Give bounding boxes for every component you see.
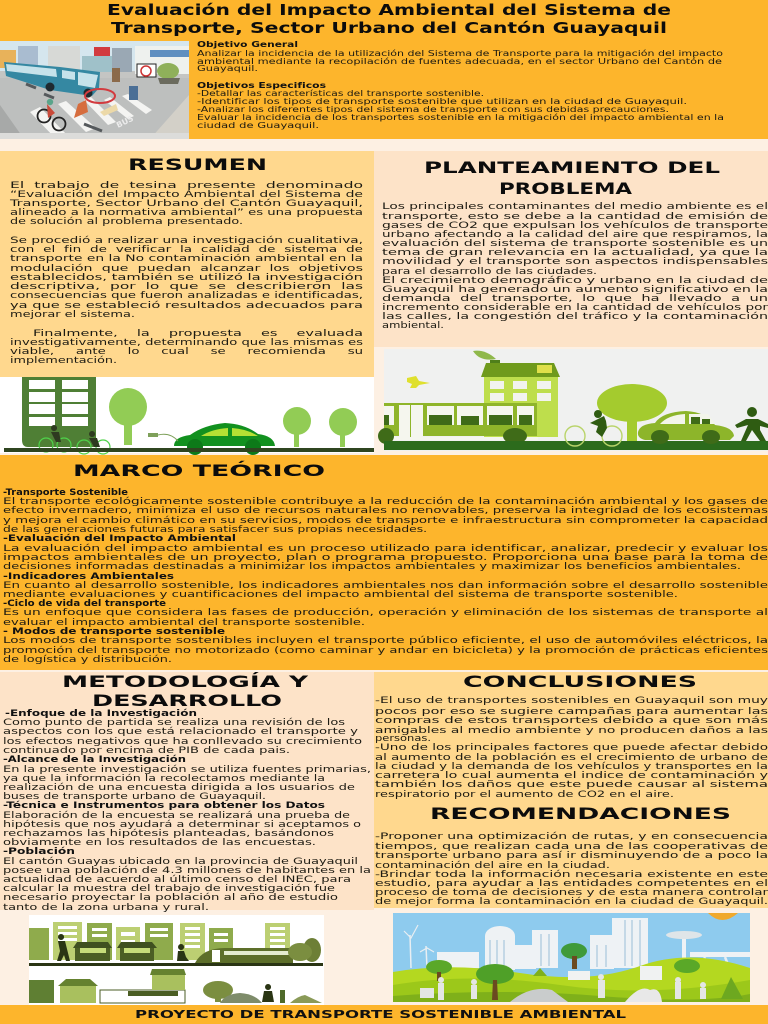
text block: conclusiones: compras de estos transportes debido a que son más	[375, 716, 768, 726]
text block: marco teórico: -Indicadores Ambientales	[3, 572, 174, 582]
text block: recomendaciones: -Brindar toda la información necesaria existente en este	[375, 869, 768, 880]
text block: metodología: continuado por encima de PIB de cada pais.	[3, 746, 290, 756]
bicycles	[39, 438, 110, 454]
objetivos especificos: Evaluar la incidencia de los transportes sostenible en la mitigación del impacto ambiental en la	[197, 113, 724, 122]
heading: metodología y desarrollo: DESARROLLO	[92, 691, 282, 710]
objetivo general: ambiental mediante la recopilación de fuentes adecuada, en el sector Urbano del Cantón de	[197, 57, 722, 66]
text block: planteamiento: evaluación del sistema de transporte sostenible es un	[382, 238, 768, 249]
text block: marco teórico: -Evaluación del Impacto Ambiental	[3, 533, 236, 544]
text block: conclusiones: -El uso de transportes sostenibles en Guayaquil son muy	[375, 696, 768, 706]
heading: metodología y desarrollo: METODOLOGÍA Y	[62, 672, 309, 691]
text block: metodología: El cantón Guayas ubicado en la provincia de Guayaquil	[3, 856, 358, 867]
text block: resumen: transporte en la No contaminación ambiental en la	[10, 253, 363, 264]
panel: conclusiones y recomendaciones	[374, 672, 768, 908]
text block: conclusiones: -Uno de los principales factores que puede afectar debido	[375, 743, 768, 753]
text block: recomendaciones: estudio, para ayudar a las entidades competentes en el	[375, 879, 768, 889]
heading: marco teórico: MARCO TEÓRICO	[73, 461, 325, 480]
cyclist	[565, 426, 622, 446]
text block: resumen: descriptiva, por lo que se describieron las	[10, 282, 364, 292]
footer text: PROYECTO DE TRANSPORTE SOSTENIBLE AMBIENTAL	[135, 1008, 626, 1021]
text block: recomendaciones: proceso de toma de decisiones y de esta manera controlar	[375, 888, 768, 898]
text block: resumen: viable, ante lo cual se recomienda su	[10, 347, 363, 357]
illustration: paper-cut sustainable city	[393, 913, 750, 1002]
text block: marco teórico: -Ciclo de vida del transporte	[3, 599, 166, 609]
text block: marco teórico: efecto invernadero, minimiza el uso de recursos naturales no renovables, preserva la integridad de los ecosistemas	[3, 506, 768, 516]
text block: metodología: hipótesis que nos ayudará a determinar si aceptamos o	[3, 819, 362, 830]
text block: recomendaciones	[375, 831, 768, 907]
text block: metodología: los efectos negativos que ha conllevado su crecimiento	[3, 737, 363, 747]
objetivos especificos: ciudad de Guayaquil.	[197, 121, 319, 130]
text block: planteamiento: tema de gran relevancia en la actualidad, ya que la	[382, 248, 768, 258]
text block: resumen	[8, 181, 364, 366]
panel: planteamiento del problema	[374, 151, 768, 347]
objetivo general: Objetivo General	[197, 40, 298, 49]
text block: conclusiones: amigables al medio ambiente y no producen daños a las	[375, 726, 768, 736]
speed sign	[137, 64, 156, 77]
text block: resumen: Transporte, Sector Urbano del Cantón Guayaquil,	[8, 198, 363, 209]
title: Transporte, Sector Urbano del Cantón Guayaquil	[111, 19, 667, 37]
illustration: green city with shops, train and bus	[29, 915, 324, 1005]
text block: resumen: implementación.	[10, 355, 117, 366]
text block: marco teórico: Los modos de transporte sostenibles incluyen el transporte público eficiente, el uso de automóviles eléctricos, la	[3, 635, 768, 646]
illustration: urban street with bus and crosswalk	[0, 41, 189, 139]
text block: metodología: -Técnica e Instrumentos para obtener los Datos	[3, 800, 325, 811]
text block: planteamiento: incremento considerable en la cantidad de vehículos por	[382, 303, 768, 313]
text block: marco teórico: mediante evaluaciones y cuantificaciones del impacto ambiental del sistema de transporte sostenible.	[3, 590, 678, 600]
text block: planteamiento: transporte, esto se debe a la cantidad de emisión de	[382, 211, 768, 222]
text block: planteamiento: gases de CO2 que expulsan los vehículos de transporte	[382, 221, 768, 231]
text block: marco teórico: de las generaciones futuras para satisfacer sus propias necesidades.	[3, 525, 427, 535]
panel: metodología y desarrollo	[0, 672, 374, 913]
text block: planteamiento: ambiental.	[382, 321, 444, 331]
text block: metodología: posee una población de 4.3 millones de habitantes en la	[3, 865, 371, 876]
text block: marco teórico: El transporte ecológicamente sostenible contribuye a la reducción de la contaminación ambiental y los gases de	[3, 496, 768, 507]
text block: recomendaciones: contaminación del aire en la ciudad.	[375, 860, 610, 871]
heading: planteamiento del problema: PROBLEMA	[499, 179, 633, 198]
crosswalk	[30, 94, 152, 139]
objetivos especificos: -Detallar las características del transporte sostenible.	[197, 89, 484, 98]
text block: marco teórico: promoción del transporte no motorizado (como caminar y andar en bicicleta) y la promoción de prácticas eficientes	[3, 645, 768, 656]
text block: recomendaciones: tiempos, que realizan cada una de las cooperativas de	[375, 842, 768, 852]
text block: metodología: calcular la muestra del trabajo de investigación fue	[3, 883, 336, 894]
text block: resumen: modulación que puedan alcanzar los objetivos	[10, 263, 363, 274]
objectives text	[197, 40, 724, 130]
text block: marco teórico: y mejora el cambio climático en su servicios, modos de transporte e infraestructura sin comprometer la capacidad	[3, 516, 768, 526]
heading: planteamiento del problema	[424, 158, 720, 198]
text block: metodología: rechazamos las hipótesis planteadas, basándonos	[3, 828, 334, 839]
text block: marco teórico: La evaluación del impacto ambiental es un proceso utilizado para identificar, analizar, predecir y evaluar los	[3, 543, 768, 554]
text block: metodología: -Población	[3, 846, 75, 857]
text block: resumen: establecidos, también se utilizó la investigación	[10, 272, 363, 283]
text block: resumen: con el fin de verificar la calidad de sistema de	[10, 245, 364, 255]
text block: marco teórico: En cuanto al desarrollo sostenible, los indicadores ambientales nos dan información sobre el desarrollo sostenible	[3, 580, 768, 591]
text block: planteamiento	[382, 202, 768, 331]
header band	[0, 0, 768, 139]
text block: conclusiones: personas.	[375, 734, 431, 744]
illustration: urban street with bus and crosswalk: BUS	[115, 114, 135, 130]
text block: resumen: “Evaluación del Impacto Ambiental del Sistema de	[10, 189, 364, 200]
heading: conclusiones: CONCLUSIONES	[463, 672, 697, 691]
text block: planteamiento: movilidad y el transporte son aspectos indispensables	[382, 257, 768, 267]
text block: marco teórico: decisiones informadas destinadas a minimizar los impactos ambientales y maximizar los beneficios ambientales.	[3, 562, 741, 572]
bus	[4, 62, 100, 96]
illustration: green bus, house, cyclist and car	[378, 349, 768, 451]
text block: marco teórico: evaluar el impacto ambiental del transporte sostenible.	[3, 618, 365, 628]
text block: metodología: obviamente en los resultados de las encuestas.	[3, 838, 316, 848]
text block: conclusiones: la ciudad y la demanda de los vehículos y transportes en la	[375, 762, 768, 772]
panel: resumen	[0, 151, 374, 377]
text block: planteamiento: las calles, la congestión del tráfico y la contaminación	[382, 311, 768, 322]
text block: marco teórico: impactos ambientales de un proyecto, plan o programa propuesto. Proporciona una base para la toma de	[3, 553, 768, 563]
text block: marco teórico: de logística y distribución.	[3, 654, 172, 665]
text block: resumen: consecuencias que fueron analizadas e identificadas,	[10, 291, 363, 301]
text block: metodología: Como punto de partida se realiza una revisión de los	[3, 717, 345, 728]
objetivos especificos: -Analizar los diferentes tipos del sistema de transporte con sus debidas precauciones.	[197, 105, 669, 114]
text block: planteamiento: para el desarrollo de las ciudades.	[382, 267, 597, 277]
text block: conclusiones: respiratorio por el aumento de CO2 en el aire.	[375, 790, 674, 800]
text block: planteamiento: Guayaquil ha generado un aumento significativo en la	[382, 285, 768, 295]
text block: metodología: -Alcance de la Investigación	[3, 754, 186, 765]
text block: metodología: En la presente investigación se utiliza fuentes primarias,	[3, 764, 371, 775]
text block: metodología: realización de una encuesta dirigida a los usuarios de	[3, 782, 356, 793]
text block: resumen: investigativamente, determinando que las mismas es	[10, 338, 363, 348]
objetivo general	[197, 40, 723, 73]
text block: marco teórico	[3, 488, 768, 665]
text block: resumen: mejorar el sistema.	[10, 310, 135, 320]
text block: metodología: ya que la información la recolectamos mediante la	[3, 773, 325, 784]
dark road dashes	[26, 84, 102, 131]
text block: metodología: aspectos con los que está relacionado el transporte y	[3, 727, 359, 737]
footer band	[0, 1005, 768, 1024]
heading: metodología y desarrollo	[62, 672, 309, 710]
objetivos especificos: -Identificar los tipos de transporte sostenible que utilizan en la ciudad de Guayaquil.	[197, 97, 687, 106]
text block: planteamiento: urbano afectando a la calidad del aire que respiramos, la	[382, 230, 768, 240]
objetivos especificos: Objetivos Especificos	[197, 81, 326, 90]
panel: marco teórico	[0, 455, 768, 670]
title	[107, 1, 671, 37]
text block: planteamiento: Los principales contaminantes del medio ambiente es el	[382, 202, 768, 212]
text block: metodología: buses de transporte urbano de Guayaquil.	[3, 792, 266, 802]
illustration: electric car, building and trees	[0, 377, 374, 455]
title: Evaluación del Impacto Ambiental del Sistema de	[107, 1, 671, 19]
objetivo general: Analizar la incidencia de la utilización del Sistema de Transporte para la mitigación del impacto	[197, 49, 723, 58]
text block: conclusiones: carretera lo cual aumenta el indice de contaminación y	[375, 770, 768, 781]
text block: resumen: alineado a la normativa ambiental” es una propuesta	[10, 208, 363, 218]
text block: marco teórico: - Modos de transporte sostenible	[3, 627, 225, 637]
heading: planteamiento del problema: PLANTEAMIENTO DEL	[424, 158, 720, 177]
text block: metodología: -Enfoque de la Investigación	[5, 708, 197, 719]
text block: conclusiones: al aumento de la población es el crecimiento de urbano de	[375, 752, 768, 763]
text block: metodología: tanto de la zona urbana y rural.	[3, 903, 209, 913]
text block: resumen: de solución al problema presentado.	[10, 216, 243, 227]
text block: planteamiento: demanda del transporte, lo que ha llevado a un	[382, 294, 768, 304]
text block: conclusiones: pocos por eso se sugiere campañas para aumentar las	[375, 707, 768, 717]
cyclist	[38, 110, 50, 122]
pedestrian	[747, 407, 757, 417]
text block: metodología: actualidad de acuerdo al último censo del INEC, para	[3, 875, 351, 885]
heading: recomendaciones: RECOMENDACIONES	[430, 804, 731, 823]
text block: planteamiento: El crecimiento demográfico y urbano en la ciudad de	[382, 276, 768, 286]
text block: resumen: Se procedió a realizar una investigación cualitativa,	[10, 235, 363, 246]
text block: recomendaciones: -Proponer una optimización de rutas, y en consecuencia	[375, 831, 768, 842]
text block: metodología: necesario proyectar la población al año de estudio	[3, 892, 339, 903]
electric car	[174, 423, 275, 446]
text block: recomendaciones: de mejor forma la contaminación en la ciudad de Guayaquil.	[375, 896, 768, 907]
text block: resumen: ya que se estableció resultados adecuados para	[10, 300, 363, 311]
text block: marco teórico: -Transporte Sostenible	[3, 488, 128, 498]
car	[638, 411, 734, 440]
text block: marco teórico: Es un enfoque que considera las fases de producción, operación y eliminación de los sistemas de transporte al	[3, 607, 768, 618]
text block: metodología	[3, 708, 371, 913]
text block: metodología: Elaboración de la encuesta se realizará una prueba de	[3, 810, 351, 821]
text block: recomendaciones: transporte urbano para así ir disminuyendo de a poco la	[375, 851, 768, 861]
objetivos especificos	[197, 81, 724, 130]
text block: conclusiones	[375, 696, 768, 800]
text block: resumen: El trabajo de tesina presente denominado	[10, 181, 364, 191]
heading: resumen: RESUMEN	[128, 155, 267, 174]
text block: resumen: Finalmente, la propuesta es evaluada	[33, 329, 363, 339]
objetivo general: Guayaquil.	[197, 64, 258, 73]
text block: conclusiones: también los daños que este puede causar al sistema	[375, 779, 768, 790]
